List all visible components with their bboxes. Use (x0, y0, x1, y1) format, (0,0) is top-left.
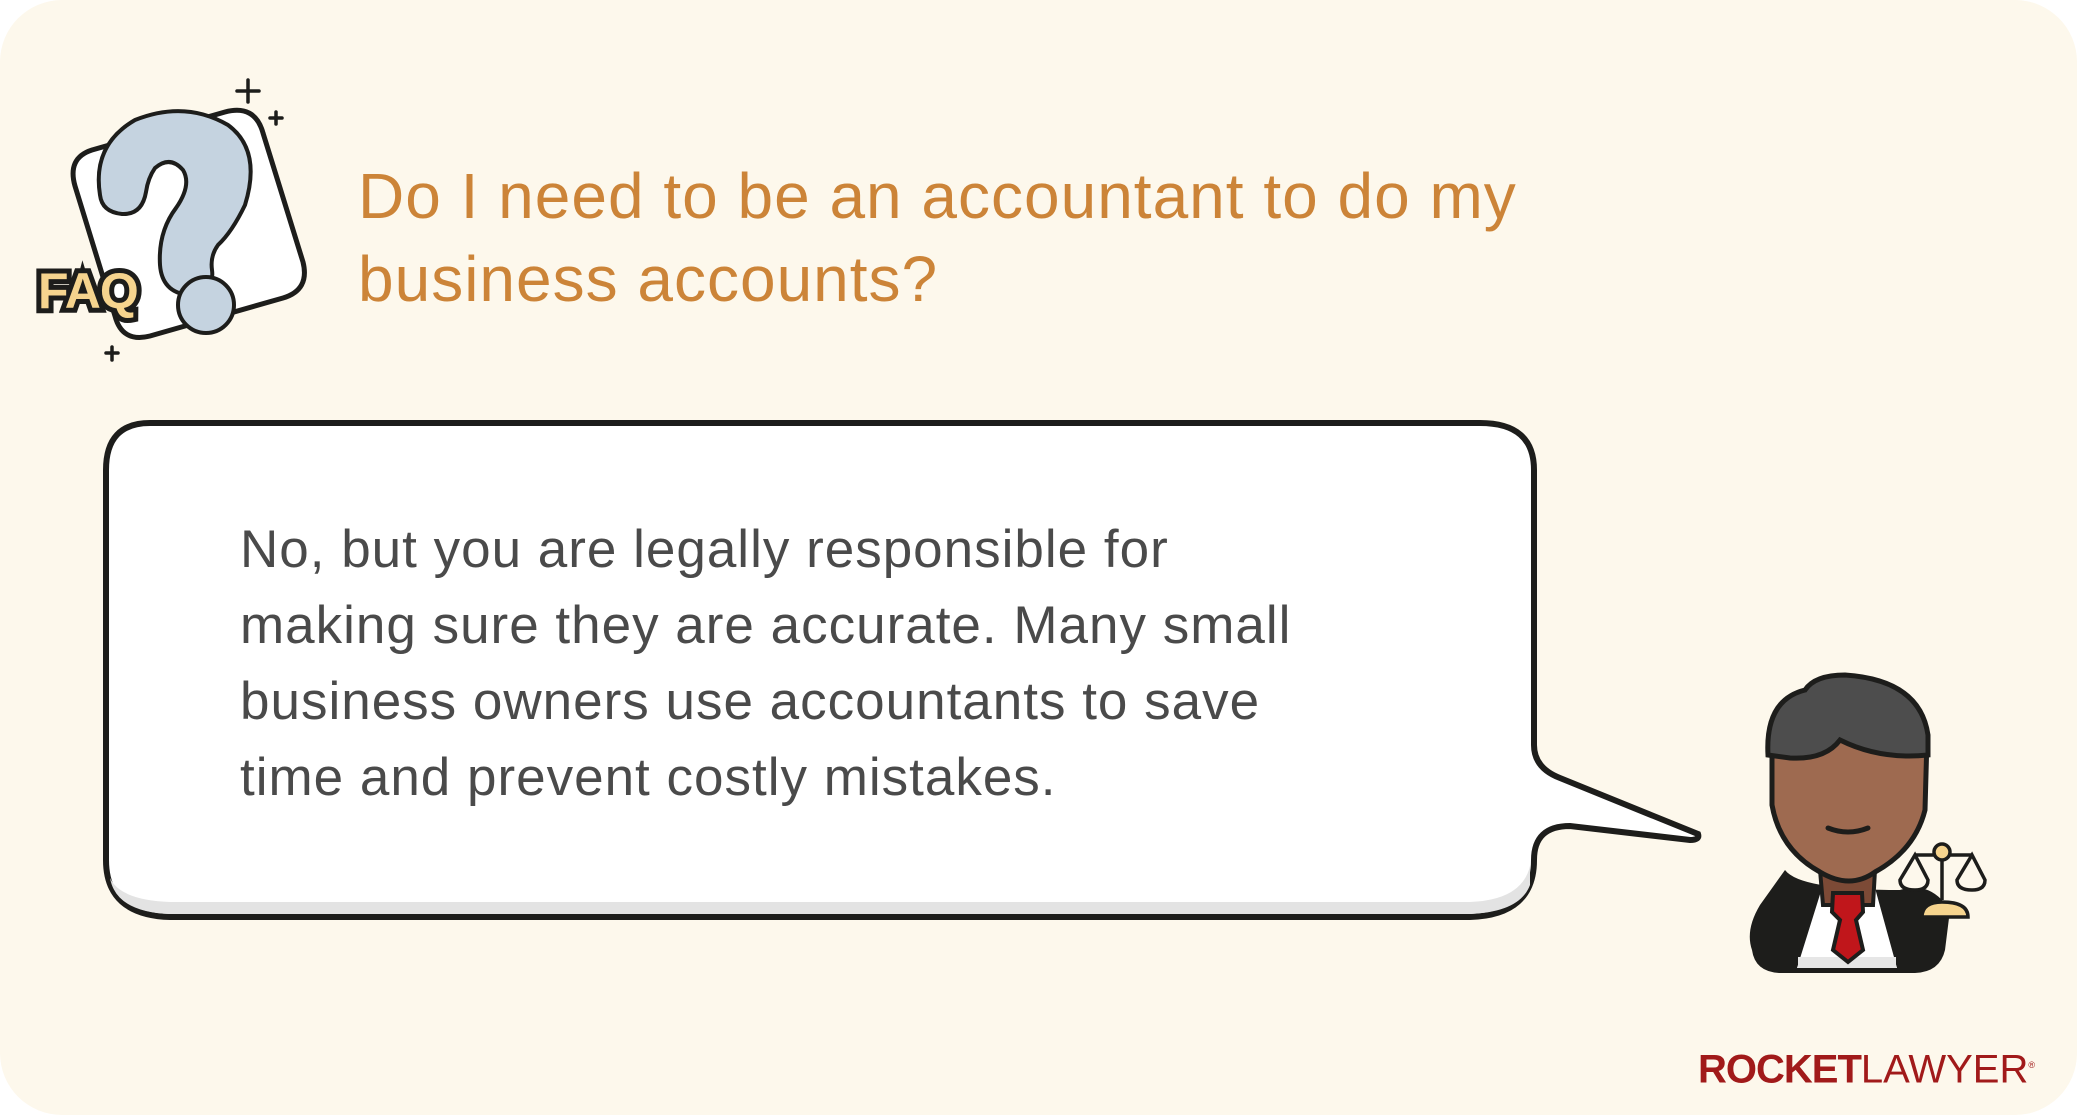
title (358, 160, 1517, 315)
icon: lawyer (1750, 672, 1987, 973)
answer text (240, 520, 1291, 807)
answer text: No, but you are legally responsible for (240, 520, 1169, 579)
answer text: time and prevent costly mistakes. (240, 748, 1057, 807)
logo: ROCKETLAWYER® (1698, 1047, 2034, 1091)
icon: FAQ question: FAQ (38, 263, 138, 319)
speech bubble (106, 423, 1698, 917)
answer text: business owners use accountants to save (240, 672, 1260, 731)
title: business accounts? (358, 243, 938, 315)
title: Do I need to be an accountant to do my (358, 160, 1517, 232)
answer text: making sure they are accurate. Many small (240, 596, 1291, 655)
icon: FAQ question (38, 80, 304, 360)
